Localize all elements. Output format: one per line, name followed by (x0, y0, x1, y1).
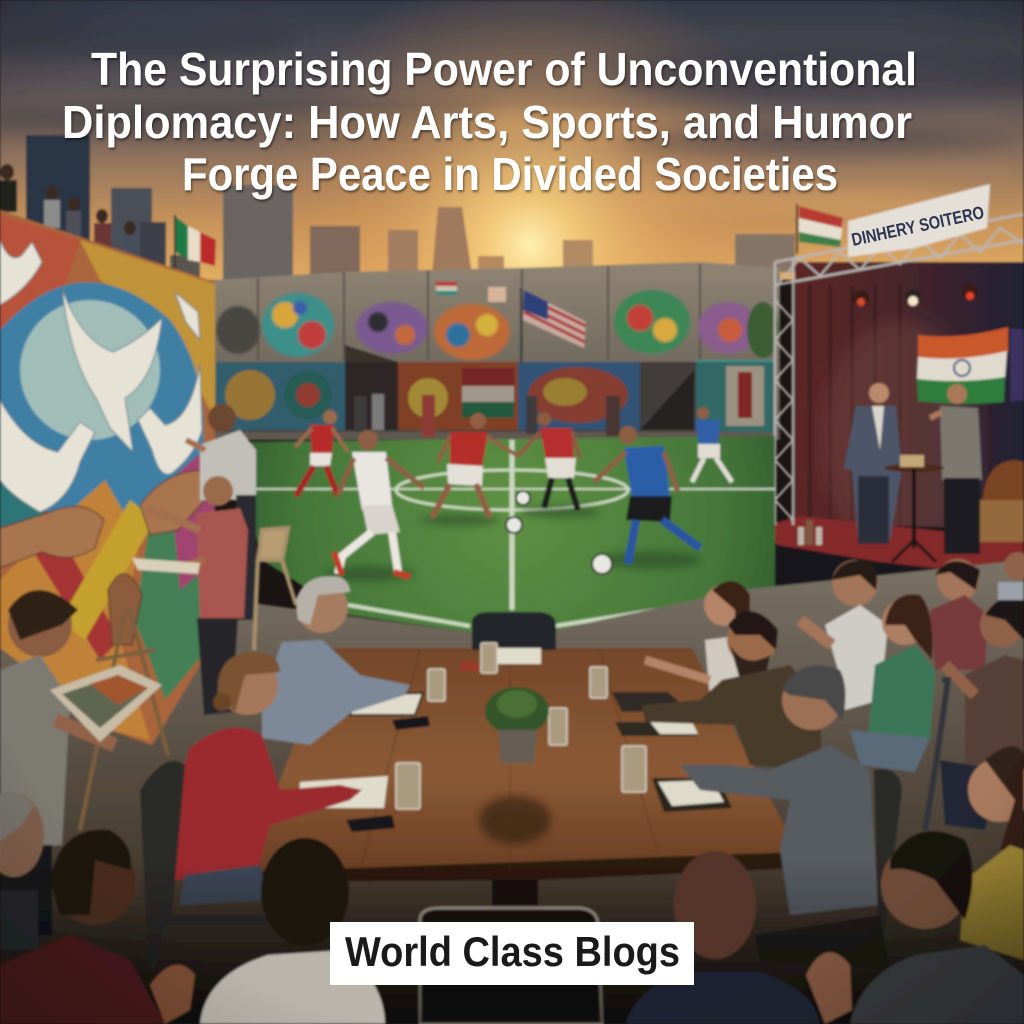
player: red far left (295, 410, 348, 496)
foreground chair back (420, 908, 602, 1024)
easel (80, 610, 168, 830)
background spectators at the wall (354, 394, 620, 437)
person at edge top right (998, 552, 1024, 600)
title: Diplomacy: How Arts, Sports, and Humor (62, 96, 912, 148)
brand label: World Class Blogs (345, 928, 680, 975)
audience: bald man foreground right (625, 851, 820, 1024)
comedian with microphone (930, 384, 982, 554)
host on stage in suit (844, 383, 902, 544)
audience: dark hair man lower left (0, 830, 195, 1024)
flag with green and red bands (796, 204, 843, 254)
chair left foreground (140, 761, 270, 970)
stage platform and curtain (738, 262, 1024, 612)
mural doves (0, 240, 202, 512)
woman at table red shirt (174, 652, 362, 905)
woman on right at table (645, 581, 750, 700)
man at table grey hair (262, 576, 410, 745)
player: blue far right (692, 407, 732, 482)
soccer balls (506, 491, 612, 574)
potted plant (485, 687, 549, 763)
audience: grey haired man far left (0, 791, 44, 950)
player: red right of centre (518, 412, 580, 510)
bottles on stage edge (798, 520, 822, 545)
title: Forge Peace in Divided Societies (182, 148, 838, 200)
american flag on wall (520, 288, 586, 364)
woman in green shirt (850, 594, 935, 772)
chair back right foreground (755, 915, 890, 970)
mural wall (0, 210, 215, 745)
lower graffiti (216, 362, 346, 430)
mural hands (0, 470, 205, 645)
banner cloth (848, 184, 990, 257)
woman yellow top far right (960, 746, 1024, 960)
city skyline (26, 135, 795, 283)
soccer field (232, 436, 775, 632)
small wall flags (436, 282, 506, 302)
chair right foreground (874, 769, 902, 930)
man with magazine left (0, 590, 162, 935)
man in white shirt clapping (800, 560, 888, 710)
banner lettering: DINHERY SOITERO (850, 202, 986, 250)
artist standing white shirt (186, 404, 256, 620)
table items (298, 648, 732, 832)
man in maroon shirt (930, 559, 988, 670)
bearded man far right (940, 597, 1024, 830)
flag on left rooftop (174, 215, 216, 275)
plaza floor (0, 560, 1024, 1024)
stage truss (775, 214, 1024, 525)
title (62, 43, 917, 200)
water glasses (396, 643, 646, 809)
title: The Surprising Power of Unconventional (91, 43, 917, 95)
sky background (0, 0, 1024, 280)
upper graffiti (216, 290, 758, 360)
stage table (884, 455, 944, 562)
graffiti wall (212, 262, 780, 440)
folding chair on field edge (254, 528, 296, 650)
brand label (330, 922, 694, 985)
empty chair at table head (472, 612, 556, 650)
tree beside the stage (747, 302, 779, 358)
foreground shade (0, 860, 1024, 1024)
folding chair right (925, 680, 948, 830)
artist in red shirt with palette (132, 476, 248, 715)
audience: back of head centre (200, 838, 385, 1024)
player: blue foreground (594, 426, 700, 564)
long table (244, 648, 798, 920)
stage lights (853, 284, 978, 306)
player: red centre (432, 413, 518, 518)
india flag on stage (917, 327, 1024, 404)
stage chair (980, 460, 1024, 542)
man with glasses brown jacket (642, 611, 822, 770)
man in grey shirt at table right (680, 666, 878, 915)
audience: man at lower right (806, 831, 1024, 1024)
player: white centre-left (334, 430, 424, 577)
rooftop spectators (0, 164, 138, 255)
